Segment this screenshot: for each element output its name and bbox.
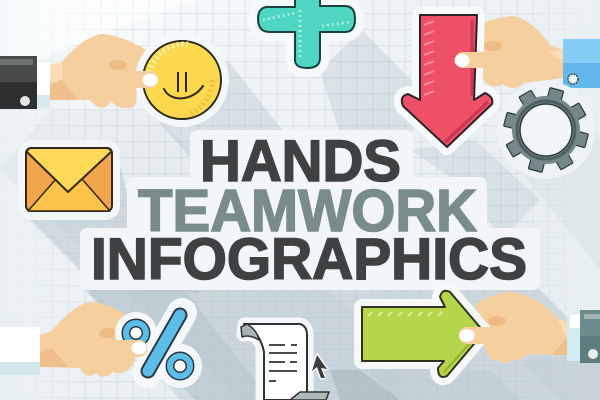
sleeve: blue cuff — [563, 39, 600, 88]
hand top left with smiley coin — [0, 33, 229, 127]
sleeve: black cuff — [0, 56, 50, 109]
icon: green right arrow — [362, 291, 484, 377]
icon: paper scroll with cursor — [241, 324, 329, 400]
sleeve: grey cuff — [567, 310, 600, 363]
title line: TEAMWORK: TEAMWORK — [138, 178, 477, 244]
fingernail — [132, 342, 146, 354]
title — [80, 129, 540, 292]
finger — [98, 340, 148, 357]
sleeve: white cuff — [0, 327, 40, 375]
icon: gear — [497, 81, 595, 179]
fingernail — [142, 74, 158, 86]
hand bottom left with white cuff — [0, 302, 202, 388]
hand — [50, 34, 150, 108]
title outline — [80, 130, 540, 290]
finger and nail on red arrow — [454, 52, 500, 68]
hand top right — [478, 16, 563, 88]
hand bottom right — [476, 292, 567, 363]
icon: plus — [258, 0, 355, 68]
icon: percent sign — [115, 312, 202, 388]
hand — [40, 302, 135, 377]
icon: smiley coin — [135, 33, 229, 127]
finger and nail on green arrow — [458, 327, 500, 344]
icon: red down arrow — [402, 15, 492, 147]
cursor — [312, 355, 327, 378]
finger over coin — [110, 71, 158, 88]
title line: INFOGRAPHICS: INFOGRAPHICS — [91, 227, 527, 292]
icon: envelope — [18, 140, 120, 220]
title line: HANDS: HANDS — [200, 129, 401, 194]
